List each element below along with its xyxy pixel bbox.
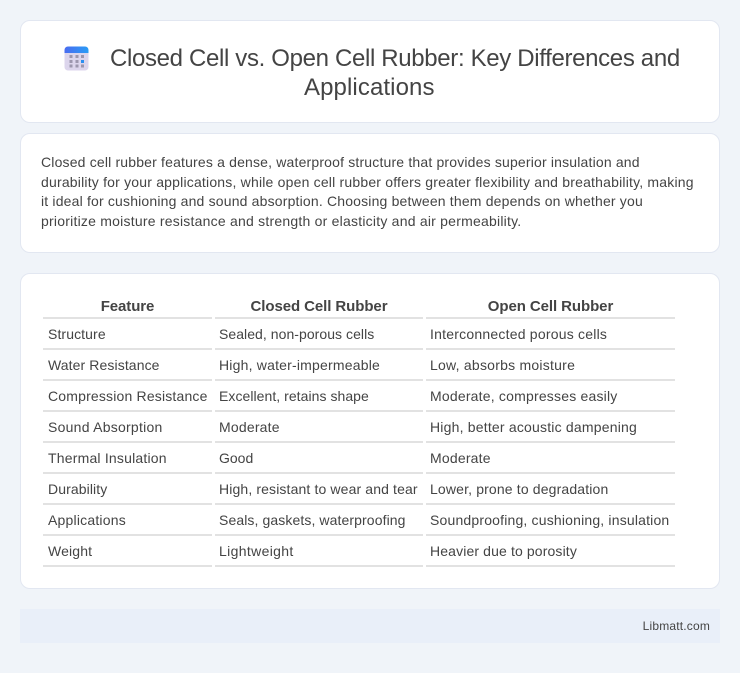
row: thermal insulation: Moderate xyxy=(430,450,491,466)
row: durability: Durability xyxy=(48,481,107,497)
row: applications: Soundproofing, cushioning, insulation xyxy=(430,512,669,528)
row: compression resistance: Compression Resistance xyxy=(48,388,208,404)
table header: Feature xyxy=(101,298,154,315)
row: sound absorption xyxy=(48,419,637,435)
title: Applications xyxy=(304,74,435,101)
row: water resistance xyxy=(48,357,575,373)
row: durability xyxy=(48,481,608,497)
row: thermal insulation: Thermal Insulation xyxy=(48,450,167,466)
table header: Open Cell Rubber xyxy=(488,298,613,315)
row: thermal insulation xyxy=(48,450,491,466)
row: structure: Interconnected porous cells xyxy=(430,326,607,342)
title: Closed Cell vs. Open Cell Rubber: Key Differences and xyxy=(110,45,680,72)
row: compression resistance: Moderate, compresses easily xyxy=(430,388,617,404)
row: structure: Structure xyxy=(48,326,106,342)
comparison table xyxy=(43,298,675,567)
panel: comparison table card xyxy=(20,273,720,589)
intro text: durability for your applications, while open cell rubber offers greater flexibility and breathability, making xyxy=(41,174,694,190)
table header xyxy=(101,298,614,315)
row: weight: Heavier due to porosity xyxy=(430,543,577,559)
row: weight: Lightweight xyxy=(219,543,294,559)
row: compression resistance xyxy=(48,388,618,404)
row: weight: Weight xyxy=(48,543,92,559)
panel: intro card xyxy=(20,133,720,253)
title xyxy=(110,45,680,101)
row: applications: Applications xyxy=(48,512,126,528)
row: durability: High, resistant to wear and tear xyxy=(219,481,418,497)
row: sound absorption: Sound Absorption xyxy=(48,419,163,435)
intro text: it ideal for cushioning and sound absorption. Choosing between them depends on whether you xyxy=(41,193,643,209)
row: applications xyxy=(48,512,669,528)
row: water resistance: High, water-impermeable xyxy=(219,357,380,373)
panel: title card xyxy=(20,20,720,123)
row: structure: Sealed, non-porous cells xyxy=(219,326,374,342)
footer text: Libmatt.com: Libmatt.com xyxy=(643,619,710,633)
row: structure xyxy=(48,326,607,342)
row: durability: Lower, prone to degradation xyxy=(430,481,608,497)
intro text xyxy=(41,154,694,229)
row: sound absorption: High, better acoustic dampening xyxy=(430,419,637,435)
row: compression resistance: Excellent, retains shape xyxy=(219,388,369,404)
row: water resistance: Water Resistance xyxy=(48,357,160,373)
intro text: Closed cell rubber features a dense, waterproof structure that provides superior insulation and xyxy=(41,154,640,170)
intro text: prioritize moisture resistance and strength or elasticity and air permeability. xyxy=(41,213,521,229)
table header: Closed Cell Rubber xyxy=(251,298,387,315)
row: thermal insulation: Good xyxy=(219,450,253,466)
footer bar xyxy=(20,609,720,643)
row: sound absorption: Moderate xyxy=(219,419,280,435)
row: weight xyxy=(48,543,577,559)
row: water resistance: Low, absorbs moisture xyxy=(430,357,575,373)
icon: calendar grid xyxy=(64,46,88,70)
row: applications: Seals, gaskets, waterproofing xyxy=(219,512,406,528)
